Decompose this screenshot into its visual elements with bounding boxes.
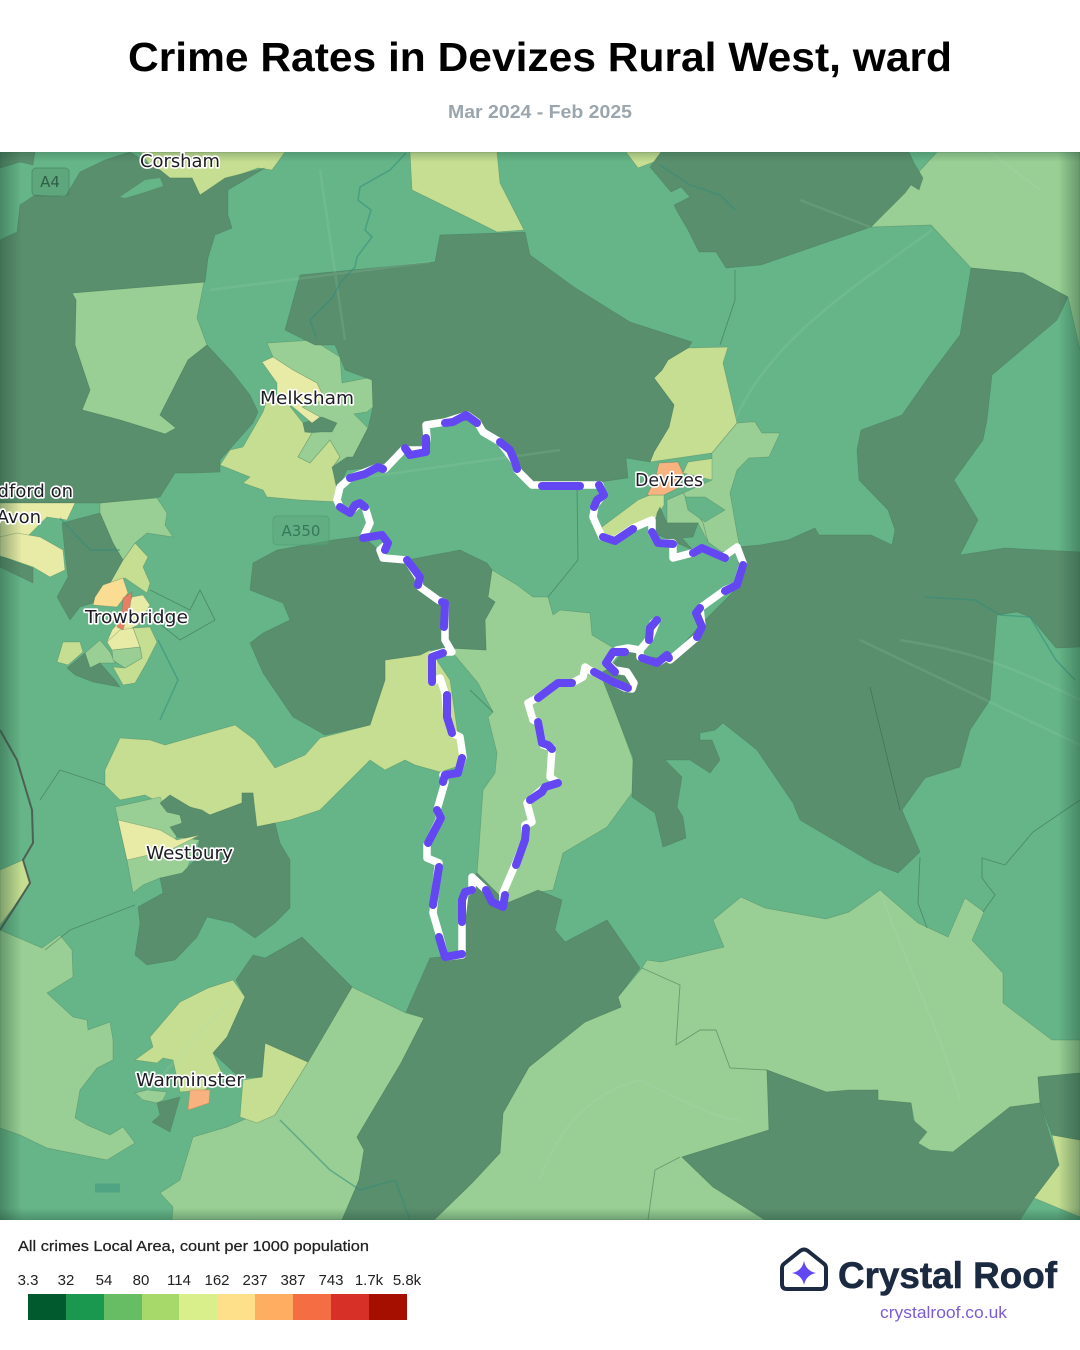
legend scale values: [18, 1272, 422, 1289]
legend scale values: 54: [96, 1272, 112, 1289]
label: Melksham: Melksham: [260, 388, 354, 409]
label: Warminster: Warminster: [136, 1070, 245, 1091]
legend scale values: 237: [242, 1272, 268, 1289]
dark green areas: [0, 152, 1080, 1220]
logo: Crystal Roof: [782, 1250, 1058, 1322]
icon: house with star: [782, 1250, 826, 1289]
logo wordmark: Crystal Roof: [838, 1255, 1058, 1296]
edge vignette: [0, 152, 1080, 1220]
legend scale values: 114: [167, 1272, 191, 1289]
website link: crystalroof.co.uk: [880, 1304, 1008, 1322]
legend scale values: 5.8k: [393, 1272, 422, 1289]
label: Westbury: Westbury: [146, 843, 233, 864]
road badge: A350: A350: [282, 522, 320, 540]
label: Devizes: Devizes: [635, 470, 703, 491]
legend colour bar: [28, 1294, 407, 1320]
mid green patch near Corsham: [120, 178, 163, 198]
legend scale values: 743: [318, 1272, 344, 1289]
legend title: All crimes Local Area, count per 1000 population: [18, 1238, 369, 1255]
light green areas: [0, 152, 1080, 1220]
legend: [18, 1238, 422, 1320]
legend scale values: 3.3: [18, 1272, 38, 1289]
pale yellow-green areas: [0, 152, 1080, 1217]
label: Bradford on Avon: [0, 481, 73, 528]
rivers: [60, 153, 1075, 1220]
legend scale values: 80: [133, 1272, 149, 1289]
legend scale values: 32: [58, 1272, 74, 1289]
ward boundary: Devizes Rural West: [337, 415, 743, 957]
subtitle: date range: Mar 2024 - Feb 2025: [448, 102, 632, 122]
ward outline: white base line: [337, 415, 743, 957]
road badge: A4: [32, 168, 69, 196]
legend scale values: 387: [280, 1272, 306, 1289]
ward outline: purple dashes: [340, 415, 743, 957]
light green town wards: [85, 340, 780, 1103]
Trowbridge town centre wards: [0, 503, 150, 650]
road badge: A350: [273, 516, 329, 545]
Warminster centre ward: [188, 1090, 210, 1110]
label: Trowbridge: Trowbridge: [84, 607, 188, 628]
legend scale values: 162: [204, 1272, 230, 1289]
choropleth map panel: [0, 151, 1080, 1220]
label: Corsham: Corsham: [140, 151, 220, 172]
roads: [140, 170, 1063, 1100]
boundary lines: [0, 270, 1080, 1220]
title: Crime Rates in Devizes Rural West, ward: [128, 34, 952, 80]
road badge: A4: A4: [40, 173, 60, 191]
Melksham and Devizes town centre wards: [118, 357, 725, 860]
legend scale values: 1.7k: [355, 1272, 384, 1289]
